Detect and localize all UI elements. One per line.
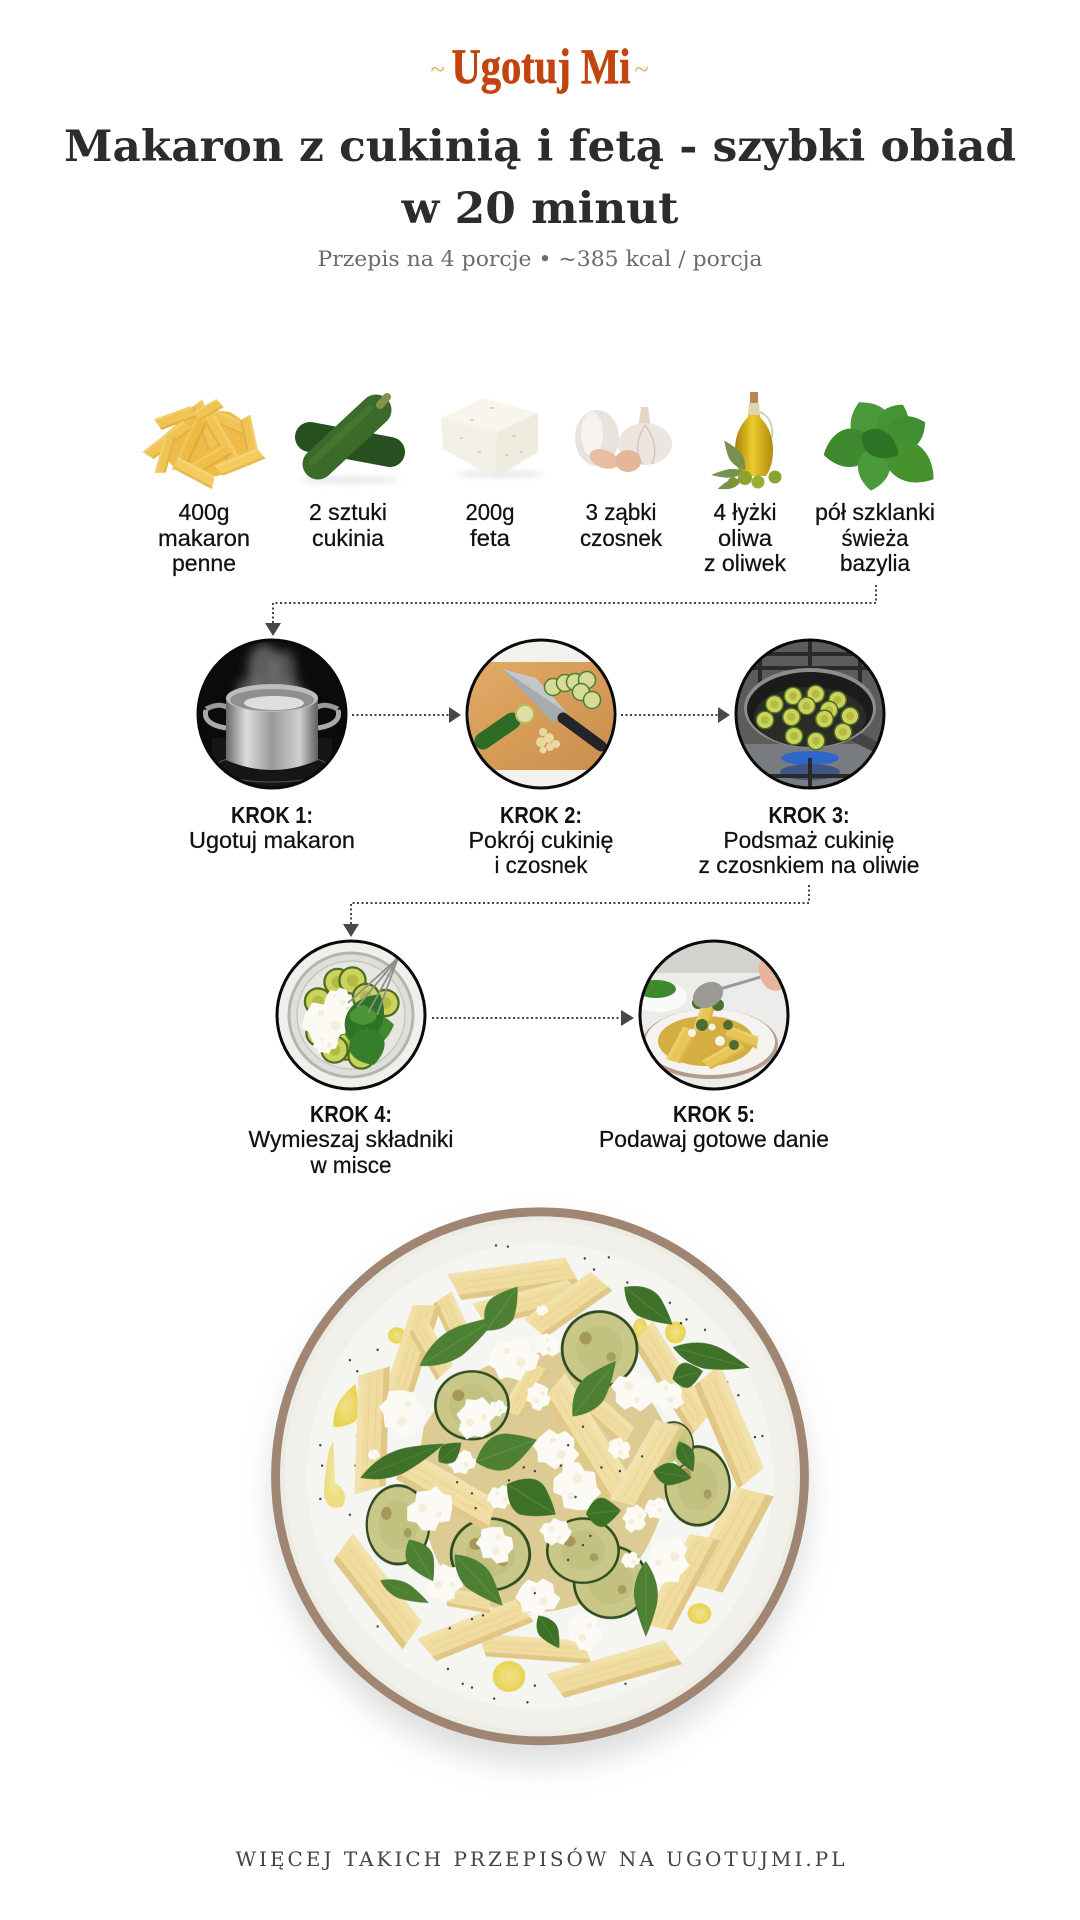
ingredient: penne [142, 398, 266, 576]
title: Makaron z cukinią i fetą - szybki obiad [64, 122, 1016, 172]
icon: olive oil bottle [711, 392, 782, 493]
label: makaron [158, 525, 250, 551]
label [158, 499, 250, 576]
title [64, 122, 1016, 234]
step image: serving plate [631, 939, 792, 1091]
label [468, 802, 614, 878]
icon: basil [819, 393, 944, 495]
basil leaves [356, 1275, 753, 1654]
label: penne [172, 550, 236, 576]
label: 2 sztuki [309, 499, 387, 525]
label: czosnek [580, 525, 662, 551]
label: oliwa [718, 525, 772, 551]
ingredient: feta [441, 398, 544, 551]
ingredient: olive oil [704, 392, 786, 576]
hero: finished pasta plate [271, 1207, 809, 1765]
label: z czosnkiem na oliwie [698, 852, 920, 878]
label [698, 802, 920, 878]
label: Wymieszaj składniki [248, 1126, 454, 1152]
label: KROK 1: [231, 802, 313, 828]
oil drops [324, 1318, 711, 1692]
penne: upper layer [388, 1373, 686, 1532]
panel: step 1 [189, 638, 355, 853]
subtitle: Przepis na 4 porcje • ~385 kcal / porcja [318, 247, 763, 272]
label [599, 1101, 829, 1152]
title: w 20 minut [400, 184, 679, 234]
step image: chopping board [465, 638, 617, 790]
pepper on food [450, 1427, 642, 1628]
step image: boiling pot [196, 638, 348, 790]
label: w misce [310, 1152, 392, 1178]
panel: step 4 [248, 939, 454, 1178]
label: 200g [466, 499, 514, 525]
logo: Ugotuj Mi: Ugotuj Mi [452, 38, 631, 94]
logo: Ugotuj Mi: ~ [430, 55, 445, 84]
arrow: step 3 to step 4 [343, 885, 809, 937]
label: KROK 5: [673, 1101, 755, 1127]
logo: Ugotuj Mi: ~ [634, 55, 649, 84]
label [309, 499, 387, 551]
label: Pokrój cukinię [468, 827, 614, 853]
step image: mixing bowl [275, 939, 427, 1091]
panel: step 2 [465, 638, 617, 878]
label: świeża [842, 525, 909, 551]
label [189, 802, 355, 853]
label: Podawaj gotowe danie [599, 1126, 829, 1152]
feta crumbles [490, 1338, 538, 1379]
label [815, 499, 935, 576]
panel: step 3 [698, 638, 920, 878]
icon: zucchini [300, 397, 400, 484]
label [580, 499, 662, 551]
pasta base [419, 1352, 672, 1613]
step image: frying pan [734, 638, 886, 790]
pepper specks [320, 1245, 762, 1702]
label: cukinia [312, 525, 384, 551]
icon: garlic [575, 407, 672, 473]
label: pół szklanki [815, 499, 935, 525]
label [466, 499, 514, 551]
ingredient: garlic [575, 407, 672, 551]
panel: step 5 [599, 939, 829, 1152]
label [248, 1101, 454, 1178]
label: z oliwek [704, 550, 786, 576]
label: 4 łyżki [714, 499, 776, 525]
arrow: ingredients to step 1 [265, 585, 876, 636]
label: Ugotuj makaron [189, 827, 355, 853]
arrow: step 1 to step 2 [352, 707, 461, 723]
arrow: step 4 to step 5 [432, 1010, 634, 1026]
arrow: step 2 to step 3 [621, 707, 730, 723]
label: i czosnek [494, 852, 588, 878]
penne: lower layer [327, 1256, 774, 1701]
icon: feta cube [441, 398, 544, 478]
label: KROK 4: [310, 1101, 392, 1127]
icon: penne pasta [142, 398, 266, 489]
footer: WIĘCEJ TAKICH PRZEPISÓW NA UGOTUJMI.PL [236, 1846, 844, 1871]
label [704, 499, 786, 576]
label: 3 ząbki [586, 499, 656, 525]
label: bazylia [840, 550, 910, 576]
label: Podsmaż cukinię [724, 827, 894, 853]
panel: ingredients [142, 392, 944, 576]
ingredient: basil [815, 393, 944, 576]
label: KROK 3: [768, 802, 850, 828]
zucchini slices [561, 1310, 638, 1388]
label: KROK 2: [500, 802, 582, 828]
label: 400g [178, 499, 230, 525]
label: feta [470, 525, 510, 551]
ingredient: zucchini [300, 397, 400, 551]
